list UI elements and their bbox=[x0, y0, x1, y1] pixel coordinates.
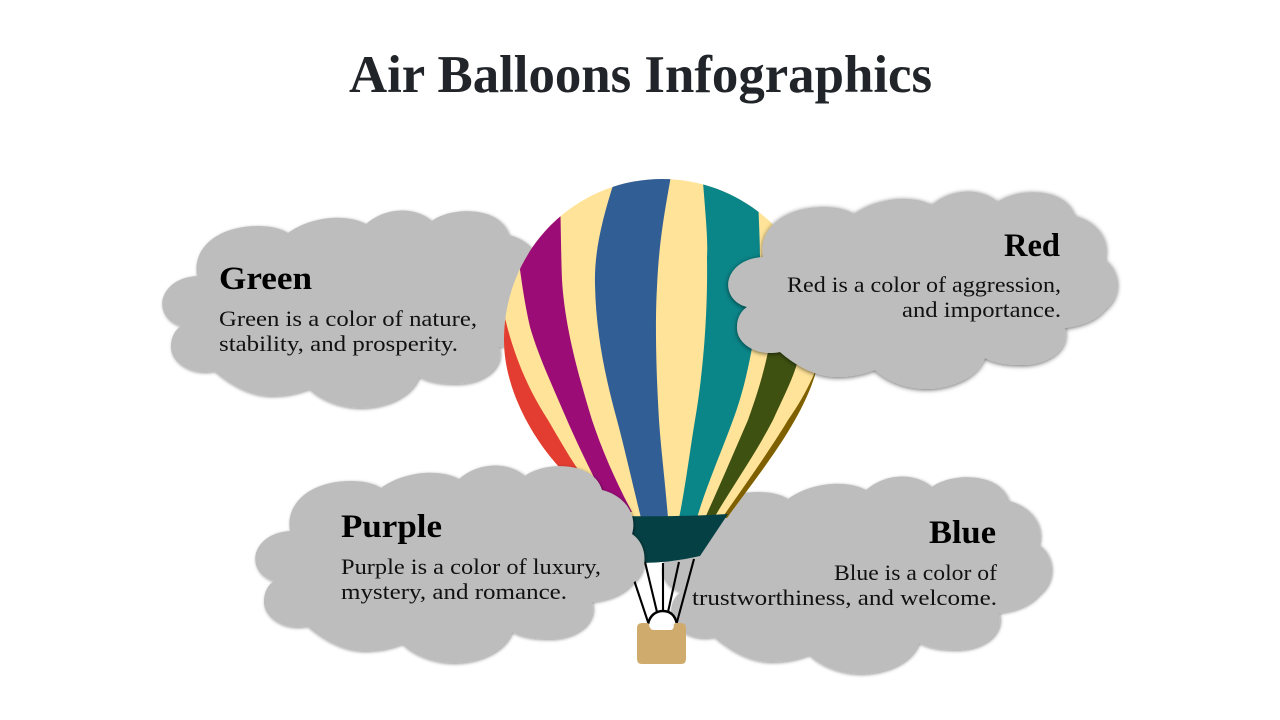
text block: red: Red is a color of aggression, bbox=[787, 272, 1061, 297]
text block: purple: Purple is a color of luxury, bbox=[341, 554, 601, 579]
hot air balloon envelope bbox=[504, 179, 816, 518]
cloud shape: green bbox=[162, 210, 552, 408]
cloud shape: purple bbox=[255, 465, 645, 663]
text block: green bbox=[219, 261, 477, 356]
stripe: red bbox=[504, 318, 578, 468]
balloon collar bbox=[620, 514, 728, 563]
text block: red: Red bbox=[1004, 228, 1060, 264]
cloud shape: blue bbox=[662, 476, 1052, 674]
stripe: olive bbox=[706, 352, 797, 516]
stripe: teal bbox=[679, 170, 760, 518]
text block: green: stability, and prosperity. bbox=[219, 331, 458, 356]
text block: blue: Blue is a color of bbox=[834, 560, 998, 585]
text block: purple bbox=[341, 509, 601, 604]
text block: purple: mystery, and romance. bbox=[341, 579, 567, 604]
text block: blue: trustworthiness, and welcome. bbox=[692, 585, 997, 610]
ropes bbox=[628, 559, 694, 622]
text block: purple: Purple bbox=[341, 509, 442, 545]
stripe: purple bbox=[520, 216, 632, 512]
stripe: blue bbox=[595, 170, 672, 518]
text block: blue: Blue bbox=[929, 515, 996, 551]
basket ring bbox=[648, 611, 677, 624]
text block: green: Green bbox=[219, 261, 312, 297]
text block: red: and importance. bbox=[902, 297, 1061, 322]
text block: green: Green is a color of nature, bbox=[219, 306, 477, 331]
title: Air Balloons Infographics bbox=[349, 46, 932, 104]
basket bbox=[637, 623, 686, 664]
stripe: brown bbox=[724, 373, 816, 518]
text block: blue bbox=[692, 515, 998, 610]
text block: red bbox=[787, 228, 1061, 322]
cloud shape: red bbox=[728, 191, 1118, 389]
